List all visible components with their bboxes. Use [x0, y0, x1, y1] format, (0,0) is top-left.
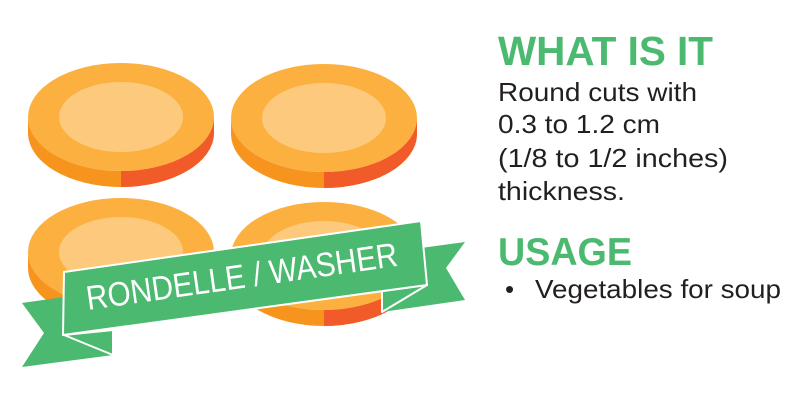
coin: top left: [28, 63, 214, 187]
coin: bottom left: [28, 198, 214, 322]
description text: thickness.: [498, 176, 625, 206]
ribbon text: RONDELLE / WASHER: [84, 236, 400, 318]
coin: bottom right: [231, 202, 417, 326]
heading: usage: USAGE: [498, 231, 632, 274]
description text: (1/8 to 1/2 inches): [498, 143, 728, 173]
description text: [498, 77, 728, 206]
heading: what is it: WHAT IS IT: [498, 28, 713, 74]
usage bullet: •: [505, 274, 514, 304]
description text: 0.3 to 1.2 cm: [498, 109, 660, 139]
coin: top right: [231, 64, 417, 188]
ribbon banner: [22, 221, 465, 367]
description text: Round cuts with: [498, 77, 697, 107]
usage bullet: Vegetables for soup: [535, 274, 781, 304]
